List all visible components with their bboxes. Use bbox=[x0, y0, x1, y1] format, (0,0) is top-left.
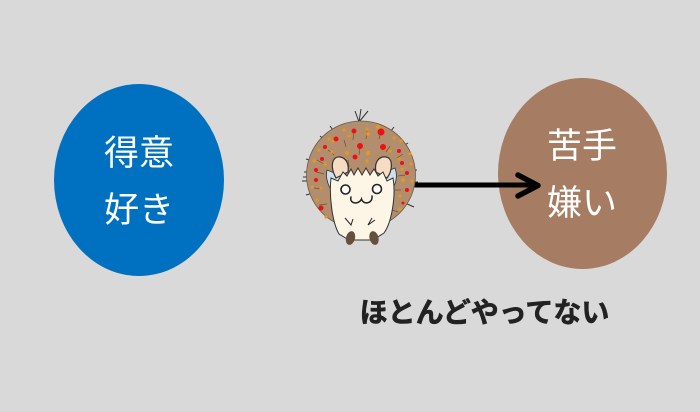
right ear back bbox=[380, 168, 396, 191]
panel: weaknesses and dislikes circle bbox=[498, 78, 667, 269]
cream face and belly bbox=[330, 168, 394, 240]
left ear back bbox=[326, 170, 342, 193]
label: strengths: 得意 bbox=[104, 134, 174, 173]
icon: hedgehog mascot bbox=[302, 109, 418, 246]
label: dislikes: 嫌い bbox=[547, 184, 617, 223]
feet bbox=[344, 230, 357, 246]
ears bbox=[332, 157, 348, 178]
label: likes: 好き bbox=[104, 191, 174, 230]
caption: ほとんどやってない bbox=[360, 297, 609, 328]
hair tuft and outer spines bbox=[302, 109, 418, 207]
brown body bbox=[306, 121, 416, 229]
panel: strengths and likes circle bbox=[54, 84, 224, 276]
arms bbox=[345, 218, 375, 225]
mouth bbox=[351, 196, 372, 203]
eyes bbox=[341, 185, 350, 194]
label: weaknesses: 苦手 bbox=[547, 127, 617, 166]
orange and red quills bbox=[314, 131, 405, 212]
arrow: hedgehog to weaknesses bbox=[415, 175, 538, 196]
